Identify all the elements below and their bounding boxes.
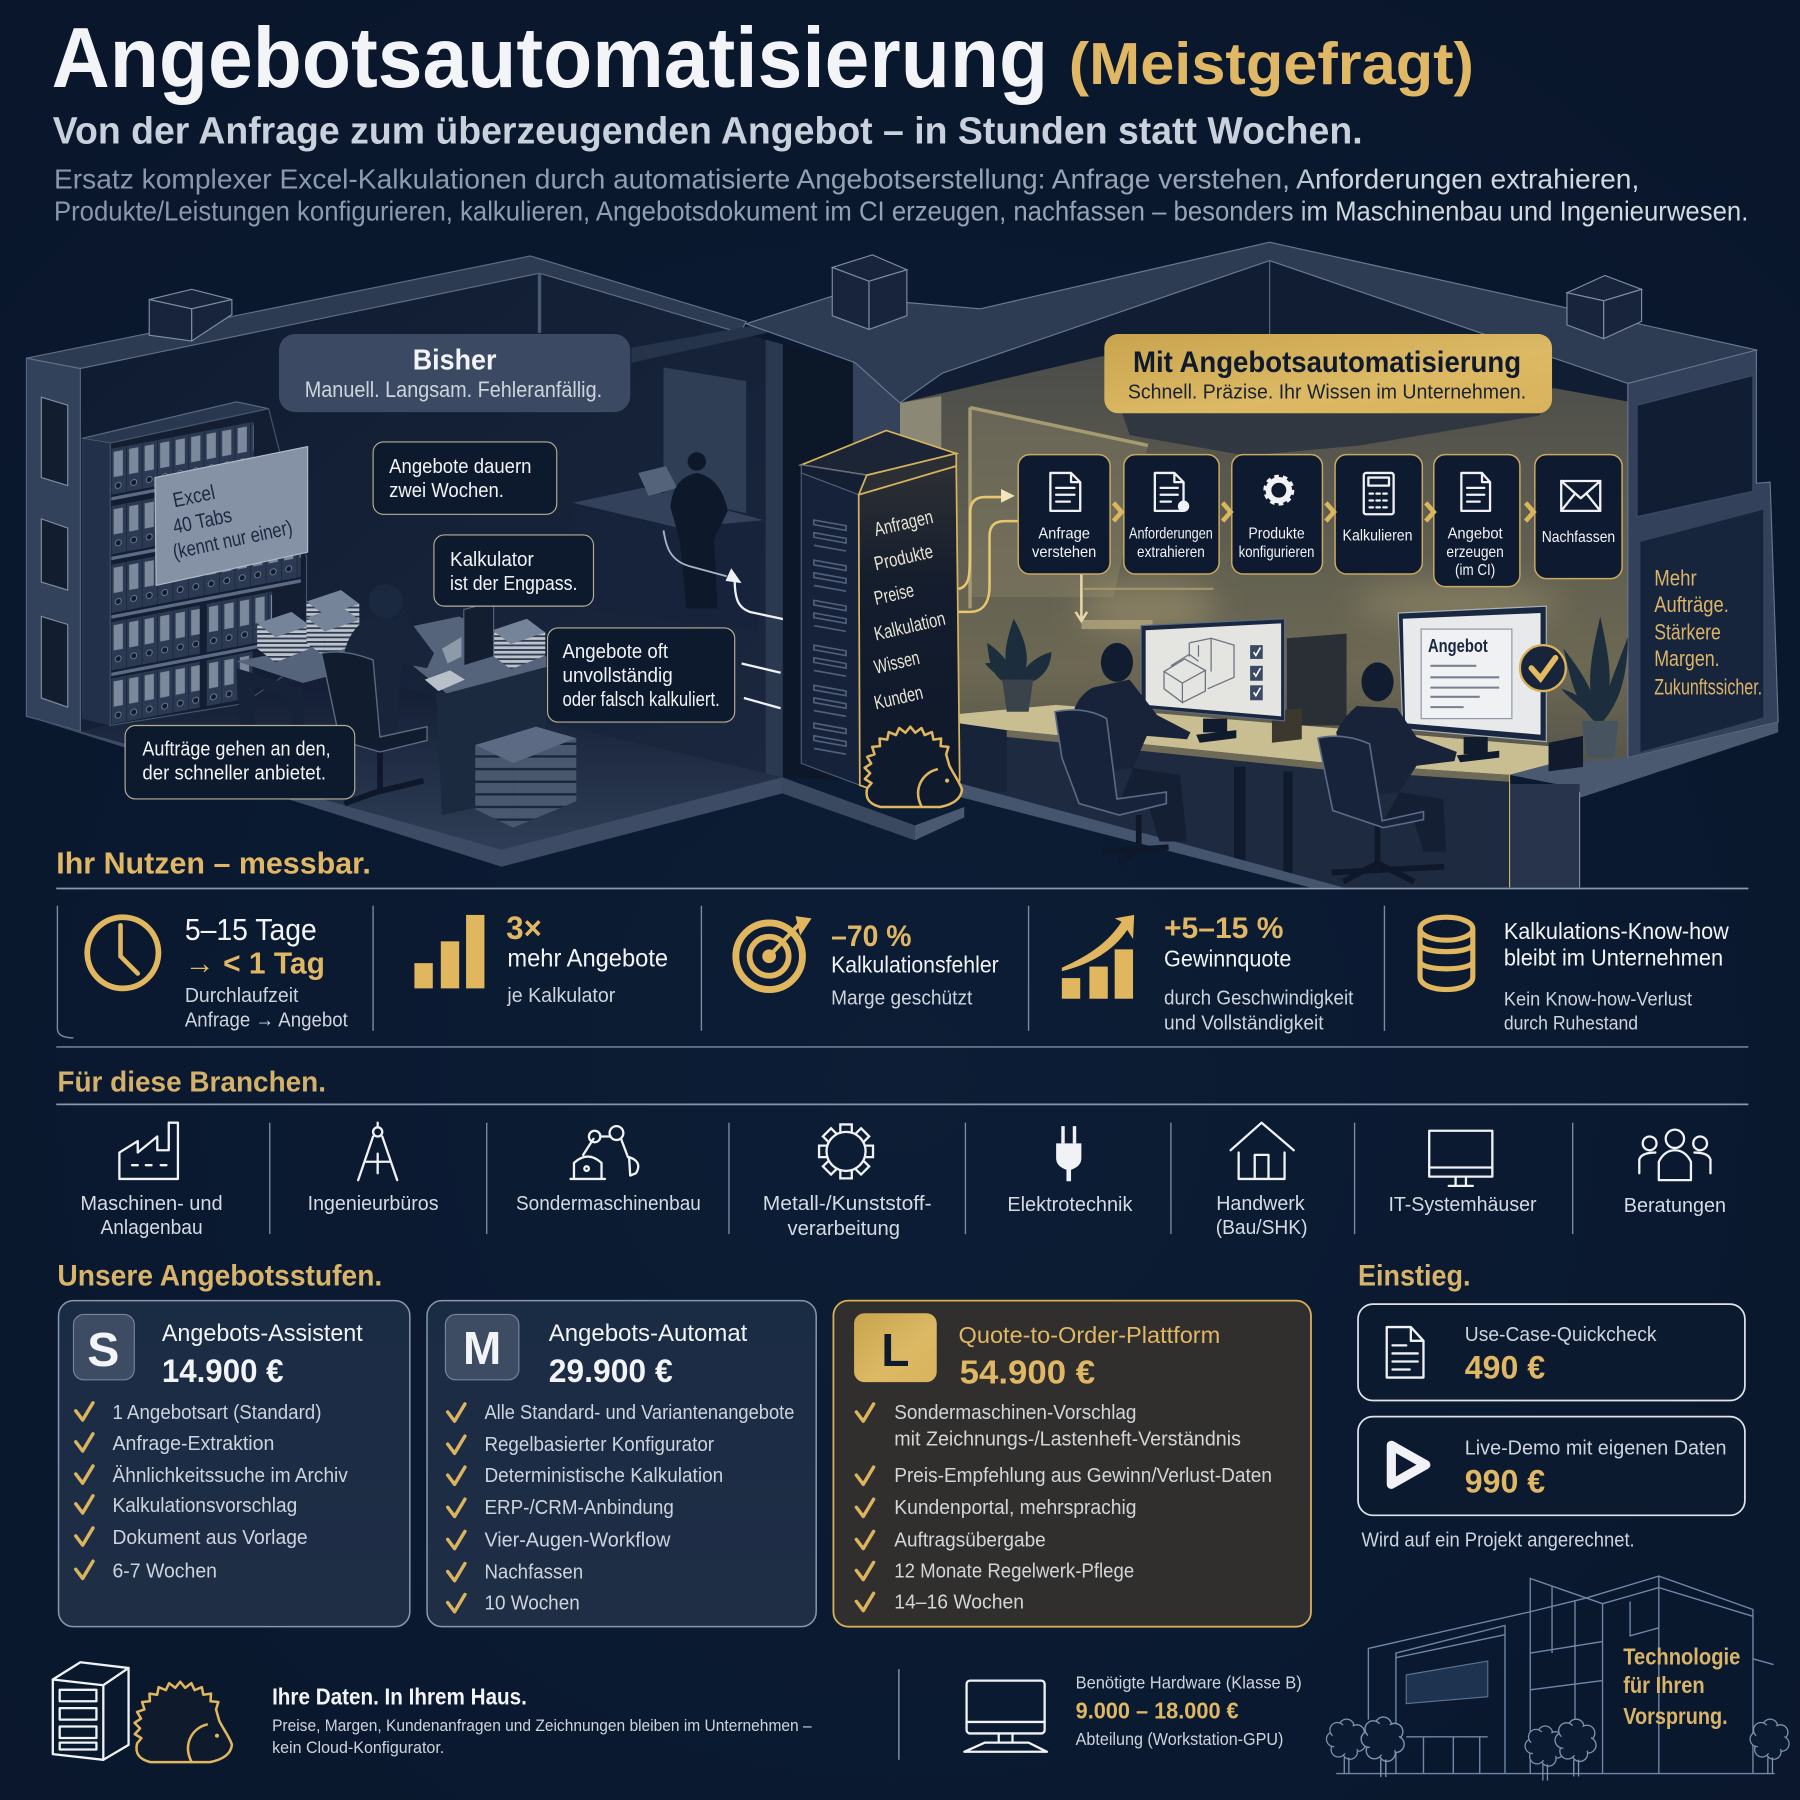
- check badge: [1520, 645, 1566, 691]
- icon: plug: [1056, 1126, 1081, 1181]
- icon: document: [1050, 473, 1080, 511]
- badge L: [854, 1313, 937, 1382]
- feature list: Nachfassen: [484, 1560, 583, 1583]
- worker right: [1318, 662, 1457, 882]
- feature list: 6-7 Wochen: [113, 1559, 217, 1582]
- data text: Preise, Margen, Kundenanfragen und Zeichnungen bleiben im Unternehmen –: [272, 1716, 812, 1735]
- callout: auftraege: der schneller anbietet.: [142, 761, 326, 784]
- branch labels: verarbeitung: [788, 1217, 900, 1240]
- feature list: ERP-/CRM-Anbindung: [484, 1496, 674, 1519]
- gold flow arrows: [959, 489, 1087, 621]
- icon: offer document: [1461, 473, 1490, 511]
- branch labels: Maschinen- und: [80, 1192, 223, 1215]
- icon: gear: [1265, 476, 1293, 504]
- icon: database: [1420, 917, 1473, 990]
- branch labels: Beratungen: [1624, 1194, 1726, 1217]
- callout: zwei wochen: Angebote dauern: [389, 455, 532, 478]
- callout: unvollstaendig: [548, 628, 735, 722]
- kpi: know-how: bleibt im Unternehmen: [1504, 944, 1723, 970]
- icon: factory: [119, 1123, 178, 1179]
- roof band right: [746, 242, 1758, 403]
- quickcheck box: Use-Case-Quickcheck: [1465, 1323, 1657, 1346]
- step labels: Kalkulieren: [1343, 527, 1413, 545]
- heading: angebotsstufen: Unsere Angebotsstufen.: [57, 1260, 382, 1293]
- icon: hedgehog: [865, 727, 962, 807]
- warm glow: [1079, 583, 1561, 634]
- heading: Einstieg.: [1358, 1260, 1471, 1293]
- icon: envelope: [1561, 481, 1600, 511]
- tier name and price: [162, 1320, 363, 1389]
- roof band: [26, 256, 746, 368]
- feature list: Vier-Augen-Workflow: [484, 1528, 670, 1551]
- plinth: [782, 777, 915, 840]
- kpi: lead time: 5–15 Tage: [185, 912, 317, 947]
- step labels: verstehen: [1032, 543, 1096, 561]
- step labels: Anforderungen: [1129, 524, 1213, 542]
- branch labels: Elektrotechnik: [1007, 1193, 1133, 1216]
- kpi: lead time: → < 1 Tag: [185, 945, 325, 980]
- tier name and price: [959, 1322, 1220, 1391]
- badge L: L: [881, 1324, 909, 1376]
- left wall: [26, 358, 80, 731]
- rack labels: Anfragen: [872, 506, 935, 541]
- footer: data sovereignty: [53, 1662, 812, 1762]
- excel note: Excel: [171, 481, 217, 512]
- icon: house: [1231, 1123, 1294, 1179]
- feature list: Anfrage-Extraktion: [113, 1432, 274, 1455]
- callout: mit automatisierung: Mit Angebotsautomatisierung: [1133, 346, 1521, 379]
- kpi: win rate: +5–15 %: [1164, 912, 1283, 945]
- step labels: Produkte: [1248, 524, 1305, 542]
- data heading: Ihre Daten. In Ihrem Haus.: [272, 1684, 527, 1710]
- back cabinet: [1287, 634, 1347, 726]
- claim: Zukunftssicher.: [1654, 675, 1762, 700]
- branch labels: Metall-/Kunststoff-: [763, 1192, 932, 1215]
- rack labels: [872, 506, 947, 714]
- monitor with cad: [1141, 619, 1285, 743]
- badge M: M: [463, 1322, 501, 1374]
- bookshelf: [82, 402, 307, 726]
- callout: engpass: Kalkulator: [450, 548, 534, 571]
- floor slab: [26, 716, 783, 867]
- panel: automatisierung office: [746, 242, 1778, 887]
- icon: compass: [358, 1123, 397, 1180]
- callout: engpass: [434, 535, 593, 606]
- kpi: win rate: Gewinnquote: [1164, 946, 1291, 972]
- intro text: [54, 163, 1748, 226]
- icon: robot arm: [571, 1126, 638, 1179]
- claim: Aufträge.: [1654, 592, 1729, 617]
- ledge: [1510, 722, 1778, 798]
- workflow steps: [1018, 455, 1622, 587]
- claim: Mehr: [1654, 565, 1697, 590]
- callout: bisher: Bisher: [413, 345, 496, 377]
- live demo box: 990 €: [1465, 1463, 1545, 1499]
- chimney centre: [832, 255, 907, 329]
- feature list: Sondermaschinen-Vorschlag: [894, 1401, 1136, 1424]
- offer label: Angebot: [1428, 635, 1488, 656]
- feature list: [448, 1401, 794, 1614]
- feature list: Dokument aus Vorlage: [113, 1526, 308, 1549]
- title suffix: (Meistgefragt): [1069, 30, 1474, 97]
- icon: server: [53, 1662, 129, 1760]
- step labels: Anfrage: [1038, 524, 1090, 542]
- badge M: [445, 1314, 519, 1380]
- callout: unvollstaendig: oder falsch kalkuliert.: [562, 688, 720, 711]
- step labels: (im CI): [1455, 561, 1495, 579]
- footer: hardware: Abteilung (Workstation-GPU): [1076, 1729, 1283, 1749]
- claim: [1623, 1644, 1740, 1729]
- office desk: [959, 705, 1778, 887]
- background worker: [573, 452, 763, 631]
- kpi: win rate: und Vollständigkeit: [1164, 1012, 1324, 1035]
- trees: [1326, 1717, 1789, 1780]
- plant left: [985, 619, 1052, 712]
- feature list: Regelbasierter Konfigurator: [484, 1433, 714, 1456]
- white process arrows: [664, 530, 792, 708]
- intro text: Ersatz komplexer Excel-Kalkulationen durch automatisierte Angebotserstellung: Anfrage verstehen, Anforderungen extrahieren,: [54, 163, 1639, 194]
- section: branchen: [56, 1067, 1748, 1240]
- rack labels: Kalkulation: [872, 608, 947, 645]
- live demo box: [1358, 1417, 1745, 1515]
- panel: tier L: [833, 1301, 1311, 1627]
- section: nutzen: [56, 846, 1748, 1047]
- feature list: Kalkulationsvorschlag: [113, 1494, 297, 1517]
- tier name and price: [549, 1320, 748, 1389]
- claim: [1654, 565, 1762, 700]
- claim: Vorsprung.: [1623, 1703, 1728, 1729]
- badge S: [73, 1314, 134, 1380]
- callout: mit automatisierung: Schnell. Präzise. Ihr Wissen im Unternehmen.: [1128, 380, 1526, 403]
- callout: auftraege: Aufträge gehen an den,: [142, 737, 331, 760]
- quickcheck box: 490 €: [1465, 1350, 1545, 1386]
- branch labels: Handwerk: [1216, 1192, 1305, 1215]
- kpi: errors: Marge geschützt: [831, 986, 973, 1009]
- claim: Margen.: [1654, 646, 1720, 671]
- feature list: Auftragsübergabe: [894, 1528, 1046, 1551]
- icon: gear outline: [819, 1124, 873, 1178]
- callout: zwei wochen: zwei Wochen.: [389, 479, 504, 502]
- feature list: Alle Standard- und Variantenangebote: [484, 1401, 794, 1424]
- kpi: errors: Kalkulationsfehler: [831, 951, 999, 977]
- rack labels: Produkte: [872, 541, 935, 575]
- feature list: [76, 1401, 348, 1582]
- footer: data sovereignty: kein Cloud-Konfigurator.: [272, 1738, 444, 1757]
- tier name and price: 54.900 €: [960, 1354, 1095, 1391]
- icon: workstation: [964, 1681, 1047, 1752]
- subtitle: Von der Anfrage zum überzeugenden Angebot – in Stunden statt Wochen.: [53, 110, 1363, 152]
- callout: zwei wochen: [373, 442, 557, 514]
- branch labels: [80, 1192, 1726, 1240]
- tier name and price: 29.900 €: [549, 1353, 673, 1389]
- callout: auftraege: [125, 726, 355, 799]
- branch labels: (Bau/SHK): [1216, 1216, 1308, 1239]
- right wall: [1628, 350, 1778, 758]
- feature list: mit Zeichnungs-/Lastenheft-Verständnis: [894, 1427, 1241, 1450]
- step labels: erzeugen: [1446, 543, 1504, 561]
- callout: bisher: Manuell. Langsam. Fehleranfällig.: [305, 377, 602, 402]
- callout: engpass: ist der Engpass.: [450, 572, 577, 595]
- kpi: lead time: Durchlaufzeit: [185, 984, 299, 1007]
- icon: target: [736, 916, 812, 990]
- feature list: 10 Wochen: [484, 1591, 580, 1614]
- kpi: know-how: Kalkulations-Know-how: [1504, 918, 1729, 944]
- step labels: [1032, 524, 1615, 579]
- live demo box: Live-Demo mit eigenen Daten: [1465, 1436, 1727, 1459]
- kpi: win rate: [1164, 912, 1354, 1035]
- icon: calculator: [1364, 473, 1394, 514]
- kpi: errors: –70 %: [831, 920, 911, 953]
- tier name and price: 14.900 €: [162, 1353, 284, 1389]
- icon: hedgehog: [135, 1682, 232, 1762]
- branch labels: Anlagenbau: [100, 1216, 203, 1239]
- central column: [783, 344, 855, 781]
- callout: mit automatisierung: [1104, 334, 1552, 413]
- icon: monitor: [1429, 1131, 1492, 1186]
- excel note: [155, 447, 308, 585]
- claim: Technologie: [1623, 1644, 1740, 1670]
- feature list: Preis-Empfehlung aus Gewinn/Verlust-Daten: [894, 1464, 1272, 1487]
- stressed worker: [321, 584, 434, 804]
- kpi: know-how: [1504, 918, 1729, 1035]
- tier name and price: Angebots-Automat: [549, 1320, 748, 1347]
- kpi: lead time: [185, 912, 348, 1031]
- rack labels: Wissen: [872, 647, 922, 679]
- floor band: [959, 783, 1343, 887]
- tier name and price: Quote-to-Order-Plattform: [959, 1322, 1220, 1348]
- icon: bars: [414, 915, 484, 988]
- claim: Stärkere: [1654, 619, 1721, 644]
- kpi: offers: 3×: [506, 910, 542, 946]
- kpi: win rate: durch Geschwindigkeit: [1164, 986, 1354, 1009]
- callout: bisher: [279, 334, 630, 412]
- bright room: [900, 340, 1629, 887]
- pen holder: [1272, 708, 1302, 743]
- kpi: lead time: Anfrage → Angebot: [185, 1008, 348, 1031]
- step labels: Nachfassen: [1542, 528, 1615, 546]
- worker left: [1055, 643, 1190, 863]
- footer: hardware: Benötigte Hardware (Klasse B): [1076, 1673, 1302, 1693]
- kpi: errors: [831, 920, 999, 1009]
- badge S: S: [87, 1323, 119, 1377]
- branch labels: IT-Systemhäuser: [1388, 1193, 1537, 1216]
- plant right: [1549, 616, 1628, 771]
- back wall column: [766, 340, 783, 777]
- title block: [52, 10, 1748, 226]
- icon: people: [1639, 1130, 1710, 1180]
- feature list: 1 Angebotsart (Standard): [113, 1401, 321, 1424]
- feature list: [856, 1401, 1272, 1613]
- callout: unvollstaendig: unvollständig: [562, 664, 673, 687]
- step labels: konfigurieren: [1239, 543, 1314, 561]
- step labels: extrahieren: [1137, 543, 1205, 561]
- ceiling shade: [1103, 340, 1553, 456]
- chimney right: [1567, 276, 1642, 339]
- attic space: [900, 261, 1629, 413]
- excel note: 40 Tabs: [171, 504, 234, 539]
- step labels: Angebot: [1448, 524, 1503, 542]
- branch labels: Ingenieurbüros: [308, 1192, 439, 1215]
- chevrons: [1114, 503, 1534, 521]
- panel: einstieg: [1358, 1260, 1745, 1551]
- chimney box: [149, 289, 232, 341]
- desk with papers: [236, 590, 546, 815]
- footer: hardware: [964, 1673, 1302, 1752]
- panel: tier M: [427, 1301, 816, 1627]
- heading: Für diese Branchen.: [57, 1067, 326, 1099]
- excel note: (kennt nur einer): [171, 516, 295, 564]
- quickcheck box: [1358, 1304, 1745, 1401]
- feature list: 12 Monate Regelwerk-Pflege: [894, 1559, 1134, 1582]
- building outline with claim: [1326, 1576, 1789, 1780]
- callout: unvollstaendig: Angebote oft: [562, 640, 668, 663]
- floor binder stack: [475, 727, 576, 828]
- heading: Ihr Nutzen – messbar.: [56, 846, 371, 881]
- server rack with data labels: [782, 430, 964, 840]
- branch labels: Sondermaschinenbau: [516, 1192, 701, 1215]
- rack labels: Kunden: [872, 682, 925, 714]
- icon: growth chart: [1062, 915, 1134, 999]
- claim: für Ihren: [1623, 1672, 1705, 1698]
- feature list: Ähnlichkeitssuche im Archiv: [113, 1464, 348, 1487]
- kpi: know-how: durch Ruhestand: [1504, 1013, 1638, 1035]
- monitor with offer: [1398, 606, 1566, 762]
- credit note: Wird auf ein Projekt angerechnet.: [1361, 1528, 1635, 1551]
- feature list: 14–16 Wochen: [894, 1590, 1024, 1613]
- rack labels: Preise: [872, 579, 916, 610]
- tier name and price: Angebots-Assistent: [162, 1320, 363, 1347]
- icon: clock: [87, 917, 158, 988]
- kpi: offers: mehr Angebote: [507, 945, 668, 973]
- icon: extraction document: [1155, 473, 1188, 511]
- kpi: know-how: Kein Know-how-Verlust: [1504, 989, 1693, 1011]
- feature list: Kundenportal, mehrsprachig: [894, 1496, 1136, 1519]
- kpi: offers: [506, 910, 668, 1007]
- panel: tier S: [59, 1301, 410, 1627]
- panel: bisher office: [26, 256, 792, 867]
- kpi: offers: je Kalkulator: [506, 984, 615, 1007]
- footer: hardware: 9.000 – 18.000 €: [1076, 1697, 1239, 1723]
- feature list: Deterministische Kalkulation: [484, 1464, 723, 1487]
- main title: Angebotsautomatisierung: [52, 10, 1048, 105]
- left room: [80, 273, 783, 849]
